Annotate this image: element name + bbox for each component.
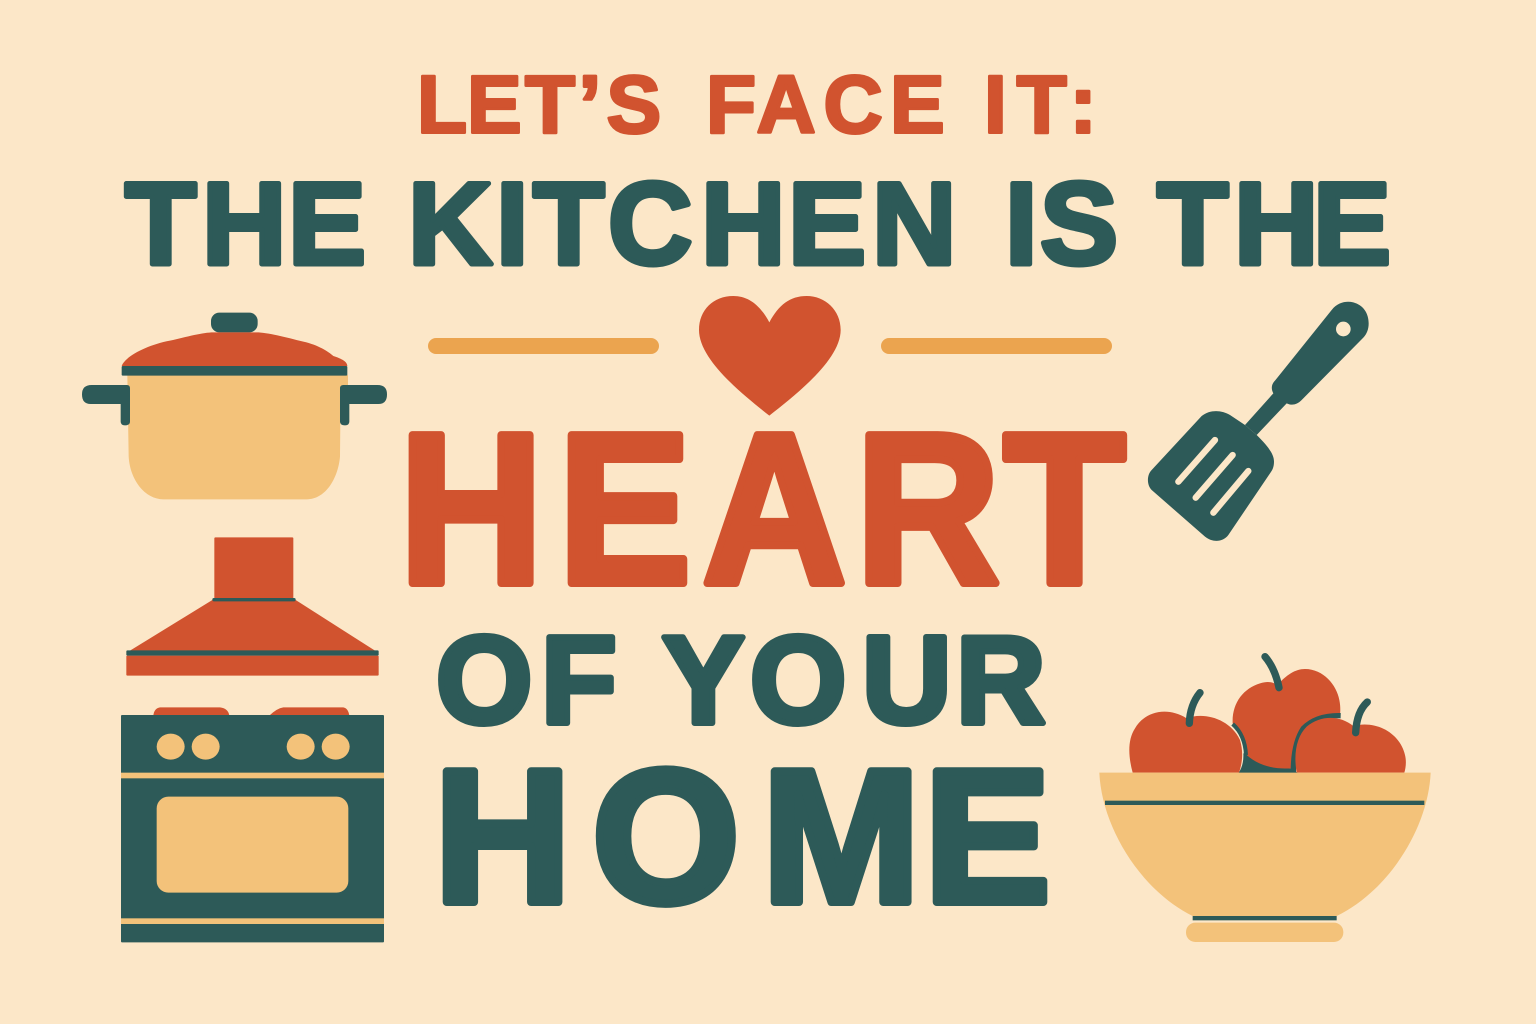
title line: let's face it: LET’S FACE IT: bbox=[417, 60, 1097, 150]
icon: bowl of apples bbox=[1099, 657, 1431, 942]
divider right bbox=[881, 338, 1112, 354]
divider left bbox=[428, 338, 659, 354]
icon: heart bbox=[699, 296, 841, 416]
icon: spatula bbox=[1148, 302, 1369, 541]
title word: home: HOME bbox=[434, 731, 1051, 943]
icon: range hood bbox=[126, 537, 379, 676]
title line: of your: OF YOUR bbox=[436, 612, 1046, 750]
icon: stove and oven bbox=[121, 707, 384, 942]
title word: heart: HEART bbox=[399, 388, 1126, 629]
icon: cooking pot bbox=[82, 313, 387, 499]
title line: the kitchen is the: THE KITCHEN IS THE bbox=[125, 158, 1391, 289]
